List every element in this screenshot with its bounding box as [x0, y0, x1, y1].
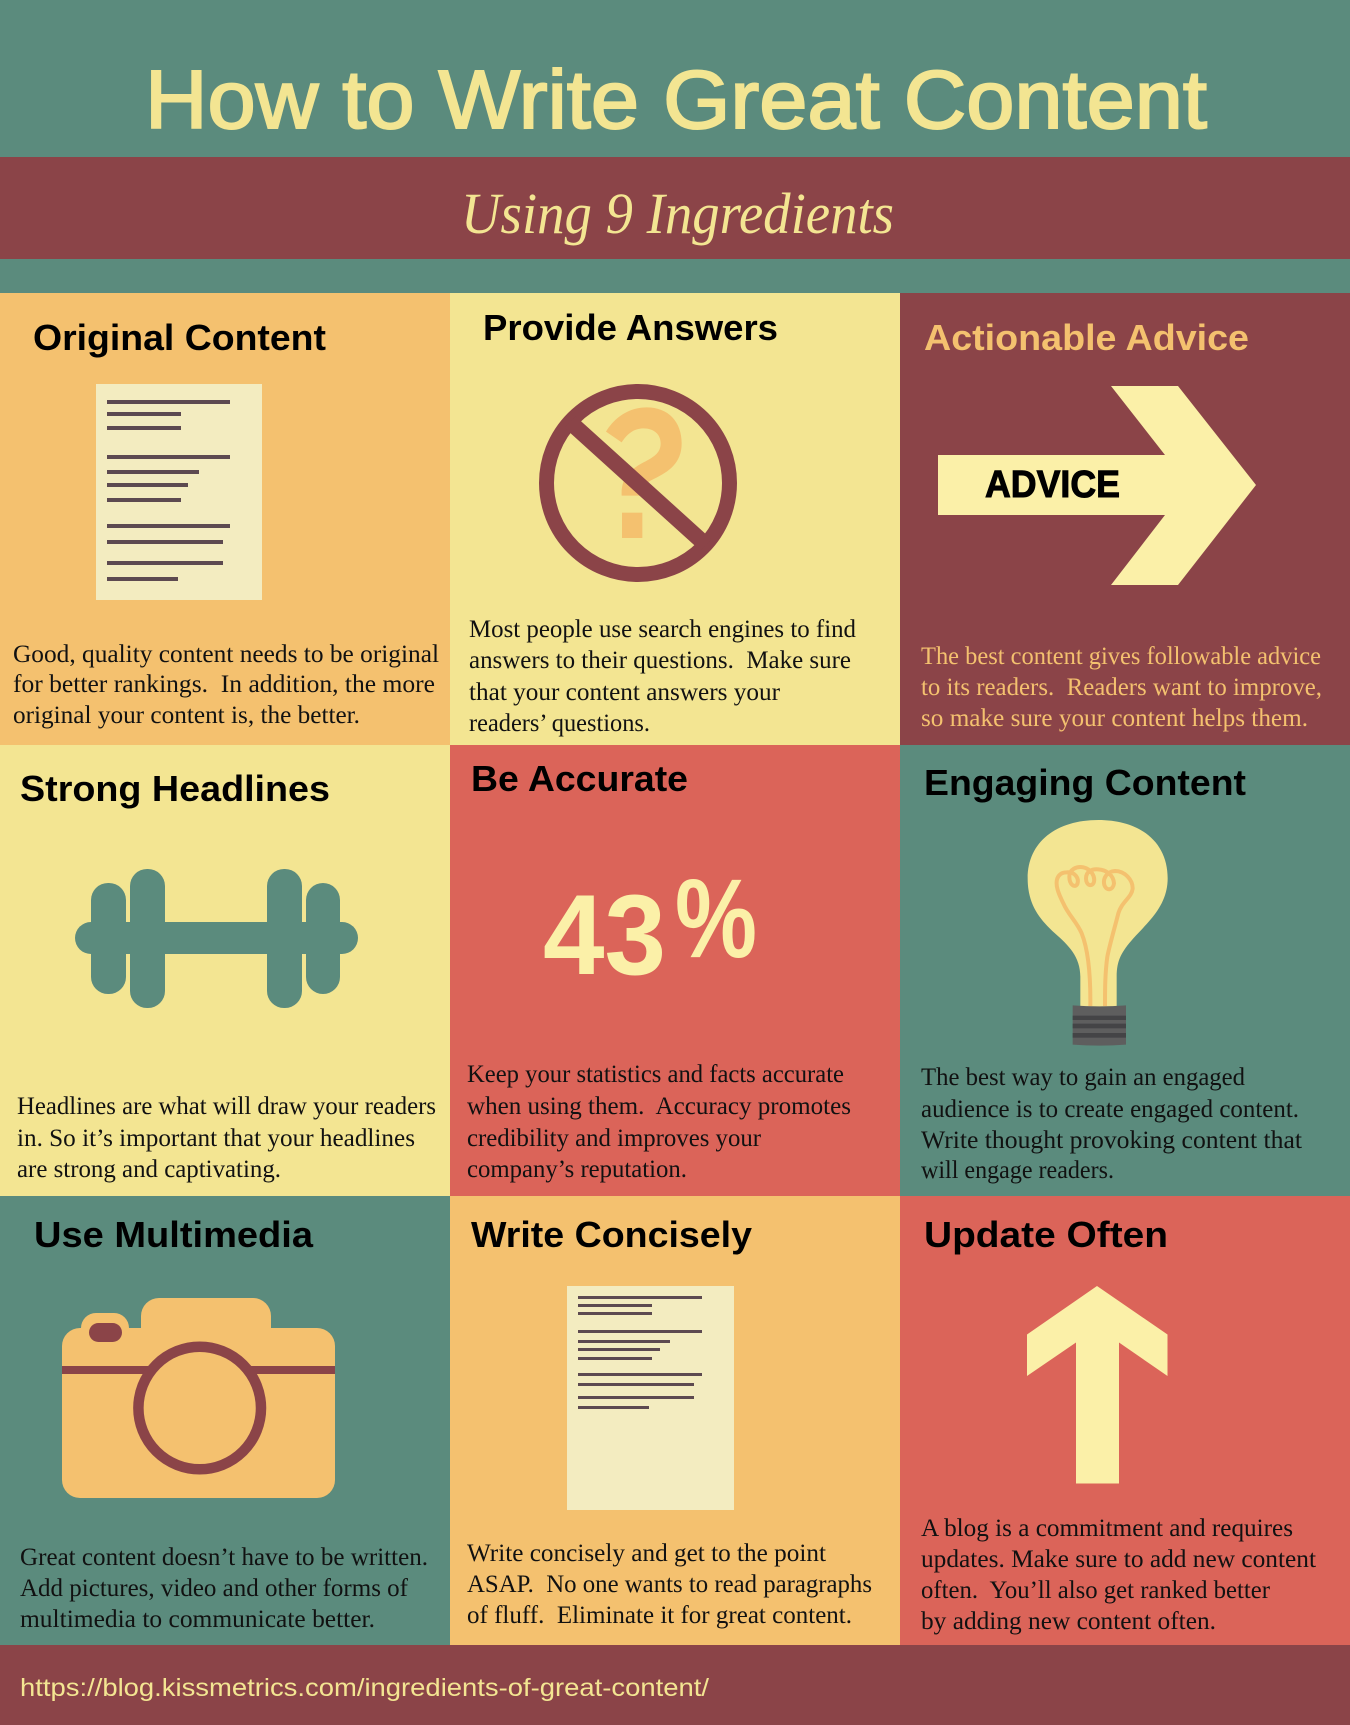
text: engaging content: [921, 1064, 1302, 1184]
text: original content: Good, quality content needs to be original: [13, 641, 439, 668]
panel: original content: [0, 293, 450, 745]
heading: actionable advice: Actionable Advice: [924, 317, 1249, 358]
heading: be accurate: Be Accurate: [471, 758, 688, 799]
text: engaging content: will engage readers.: [921, 1157, 1114, 1184]
text: be accurate: Keep your statistics and facts accurate: [467, 1061, 844, 1088]
text: strong headlines: [17, 1093, 436, 1183]
panel: use multimedia: [0, 1196, 450, 1645]
icon: up arrow: [1027, 1286, 1168, 1484]
heading: update often: Update Often: [924, 1214, 1168, 1255]
subtitle band: [0, 157, 1350, 259]
text: update often: [921, 1515, 1316, 1635]
text: write concisely: ASAP. No one wants to read paragraphs: [467, 1571, 872, 1598]
icon: crossed-out question mark: [546, 392, 730, 574]
text: update often: A blog is a commitment and requires: [921, 1515, 1293, 1542]
text: be accurate: [467, 1061, 851, 1183]
icon: camera: [62, 1298, 335, 1498]
icon: dumbbell: [75, 869, 358, 1008]
heading: use multimedia: Use Multimedia: [34, 1214, 314, 1255]
text: be accurate: company’s reputation.: [467, 1156, 687, 1183]
panel: actionable advice: [900, 293, 1350, 745]
text: update often: often. You’ll also get ranked better: [921, 1577, 1271, 1604]
text: be accurate: credibility and improves your: [467, 1125, 762, 1152]
text: write concisely: of fluff. Eliminate it for great content.: [467, 1602, 852, 1629]
panel: provide answers: [450, 293, 900, 745]
icon: document: [96, 384, 262, 600]
statistic: 43%: 43: [543, 872, 666, 999]
text: engaging content: Write thought provoking content that: [921, 1127, 1302, 1154]
text: actionable advice: so make sure your content helps them.: [921, 705, 1308, 732]
panel: update often: [900, 1196, 1350, 1645]
text: engaging content: audience is to create engaged content.: [921, 1096, 1299, 1123]
text: update often: updates. Make sure to add new content: [921, 1546, 1316, 1573]
title: How to Write Great Content: [145, 53, 1207, 146]
panel: engaging content: [900, 745, 1350, 1196]
heading: provide answers: Provide Answers: [483, 307, 778, 348]
heading: write concisely: Write Concisely: [471, 1214, 752, 1255]
text: strong headlines: are strong and captivating.: [17, 1156, 281, 1183]
text: provide answers: Most people use search engines to find: [469, 616, 856, 643]
text: write concisely: [467, 1540, 872, 1629]
panel: strong headlines: [0, 745, 450, 1196]
text: provide answers: that your content answers your: [469, 679, 781, 706]
subtitle: Using 9 Ingredients: [461, 181, 894, 246]
text: strong headlines: Headlines are what will draw your readers: [17, 1093, 436, 1120]
text: original content: for better rankings. In addition, the more: [13, 671, 435, 698]
panel: be accurate: [450, 745, 900, 1196]
text: use multimedia: Great content doesn’t have to be written.: [20, 1544, 428, 1571]
text: provide answers: [469, 616, 856, 737]
text: use multimedia: [20, 1544, 428, 1633]
text: original content: [13, 641, 439, 729]
statistic: 43%: %: [675, 856, 757, 981]
text: provide answers: readers’ questions.: [469, 710, 650, 737]
panel: write concisely: [450, 1196, 900, 1645]
footer: [0, 1645, 1350, 1725]
text: update often: by adding new content often.: [921, 1608, 1216, 1635]
heading: strong headlines: Strong Headlines: [20, 768, 330, 809]
text: use multimedia: Add pictures, video and other forms of: [20, 1575, 409, 1602]
icon: advice arrow: [938, 386, 1256, 585]
text: actionable advice: The best content gives followable advice: [921, 643, 1321, 670]
statistic: 43%: [543, 856, 757, 999]
arrow label: ADVICE: [985, 464, 1120, 506]
source url: https://blog.kissmetrics.com/ingredients-of-great-content/: [20, 1674, 709, 1702]
text: actionable advice: to its readers. Readers want to improve,: [921, 674, 1322, 701]
text: be accurate: when using them. Accuracy promotes: [467, 1093, 851, 1120]
text: write concisely: Write concisely and get to the point: [467, 1540, 826, 1567]
text: use multimedia: multimedia to communicate better.: [20, 1606, 375, 1633]
text: engaging content: The best way to gain an engaged: [921, 1064, 1245, 1091]
header band: [0, 0, 1350, 157]
heading: engaging content: Engaging Content: [924, 762, 1246, 803]
icon: light bulb: [1028, 820, 1168, 1046]
heading: original content: Original Content: [33, 317, 326, 358]
text: original content: original your content is, the better.: [13, 702, 360, 729]
icon: short document: [567, 1286, 734, 1510]
text: provide answers: answers to their questions. Make sure: [469, 647, 851, 674]
text: strong headlines: in. So it’s important that your headlines: [17, 1125, 415, 1152]
text: actionable advice: [921, 643, 1322, 732]
